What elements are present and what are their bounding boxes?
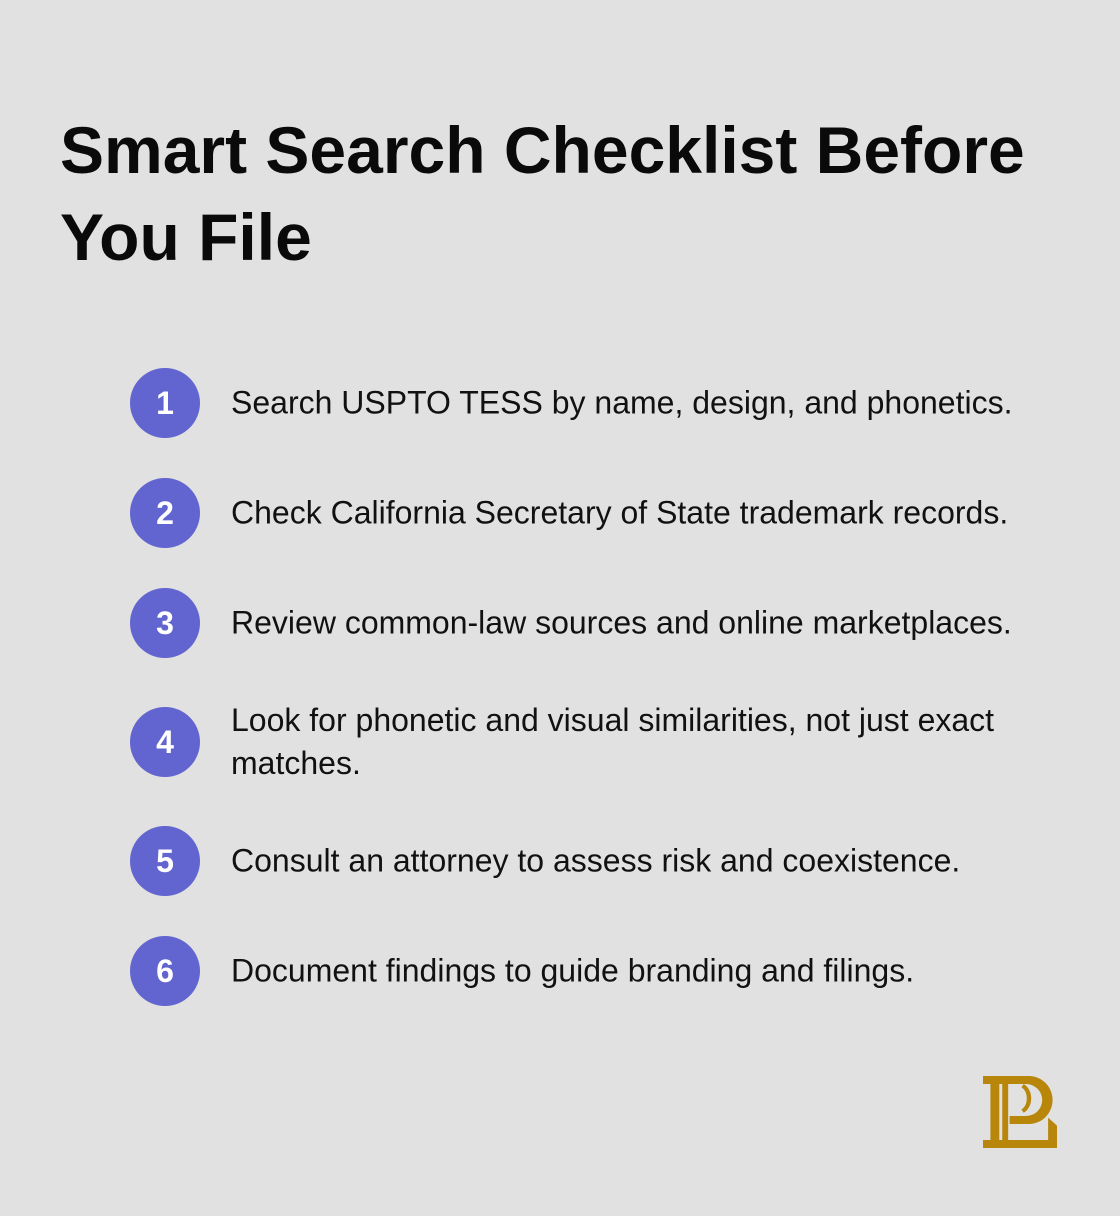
item 3 bbox=[130, 588, 1012, 658]
item 5 bbox=[130, 826, 960, 896]
item 5: 5 bbox=[156, 843, 174, 879]
item 6: 6 bbox=[156, 953, 174, 989]
title: Smart Search Checklist Before You File bbox=[60, 113, 1025, 274]
logo bbox=[983, 1076, 1057, 1148]
item 3: Review common-law sources and online marketplaces. bbox=[231, 604, 1012, 640]
item 4: 4 bbox=[156, 724, 174, 760]
item 2: 2 bbox=[156, 495, 174, 531]
item 1 bbox=[130, 368, 1012, 438]
item 2: Check California Secretary of State trademark records. bbox=[231, 494, 1008, 530]
item 4: Look for phonetic and visual similarities, not just exact matches. bbox=[231, 702, 994, 781]
item 1: 1 bbox=[156, 385, 174, 421]
item 1: Search USPTO TESS by name, design, and phonetics. bbox=[231, 384, 1012, 420]
item 5: Consult an attorney to assess risk and coexistence. bbox=[231, 842, 960, 878]
item 6: Document findings to guide branding and filings. bbox=[231, 952, 914, 988]
item 2 bbox=[130, 478, 1008, 548]
item 3: 3 bbox=[156, 605, 174, 641]
item 6 bbox=[130, 936, 914, 1006]
